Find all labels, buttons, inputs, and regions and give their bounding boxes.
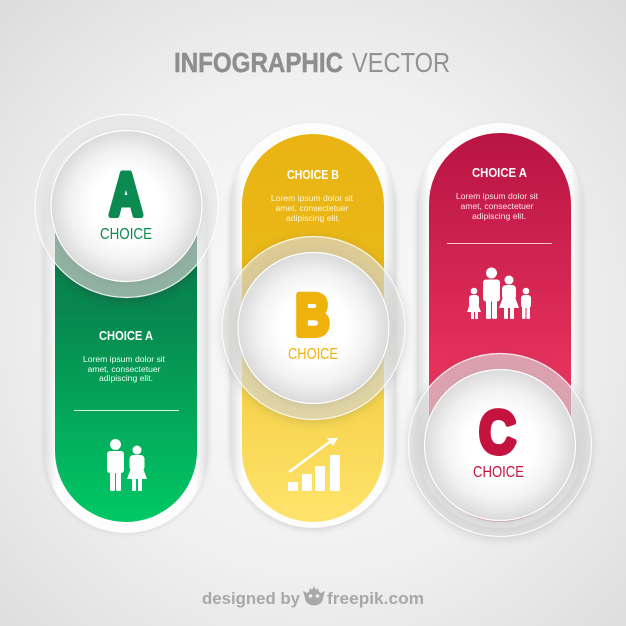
icon: family: [467, 268, 531, 319]
text block: yellow description: amet, consectetuer: [275, 203, 349, 213]
icon: freepik logo: [303, 586, 325, 606]
badge: circle C: [408, 354, 592, 539]
icon: couple: [107, 439, 147, 491]
footer credit: freepik.com: [327, 589, 424, 608]
letter C: C: [479, 399, 516, 466]
label: choice: CHOICE: [288, 346, 338, 363]
heading: red choice A: CHOICE A: [472, 166, 527, 180]
title: INFOGRAPHIC: [174, 47, 343, 78]
text block: red description: [456, 191, 539, 221]
footer credit: [202, 586, 424, 608]
text block: yellow description: Lorem ipsum dolor sit: [271, 193, 354, 203]
footer credit: designed by: [202, 589, 301, 608]
text block: red description: adipiscing elit.: [472, 211, 526, 221]
letter B: B: [296, 283, 330, 348]
text block: green description: amet, consectetuer: [87, 364, 161, 374]
text block: yellow description: [271, 193, 354, 223]
panel: red choice A: [417, 123, 583, 530]
badge: circle B: [222, 236, 406, 422]
panel: green choice A: [44, 130, 208, 533]
label: choice: CHOICE: [100, 226, 152, 243]
title: VECTOR: [352, 47, 450, 78]
panel: yellow choice B: [230, 123, 396, 530]
label: choice: CHOICE: [473, 464, 524, 481]
text block: green description: adipiscing elit.: [99, 373, 153, 383]
icon: growth chart: [288, 438, 340, 491]
text block: red description: amet, consectetuer: [460, 201, 534, 211]
letter A: A: [110, 161, 142, 228]
heading: choice A: CHOICE A: [99, 329, 153, 343]
badge: circle A: [34, 114, 218, 300]
text block: green description: [83, 354, 166, 383]
text block: red description: Lorem ipsum dolor sit: [456, 191, 539, 201]
text block: green description: Lorem ipsum dolor sit: [83, 354, 166, 364]
heading: choice B: CHOICE B: [287, 168, 339, 182]
text block: yellow description: adipiscing elit.: [286, 213, 340, 223]
